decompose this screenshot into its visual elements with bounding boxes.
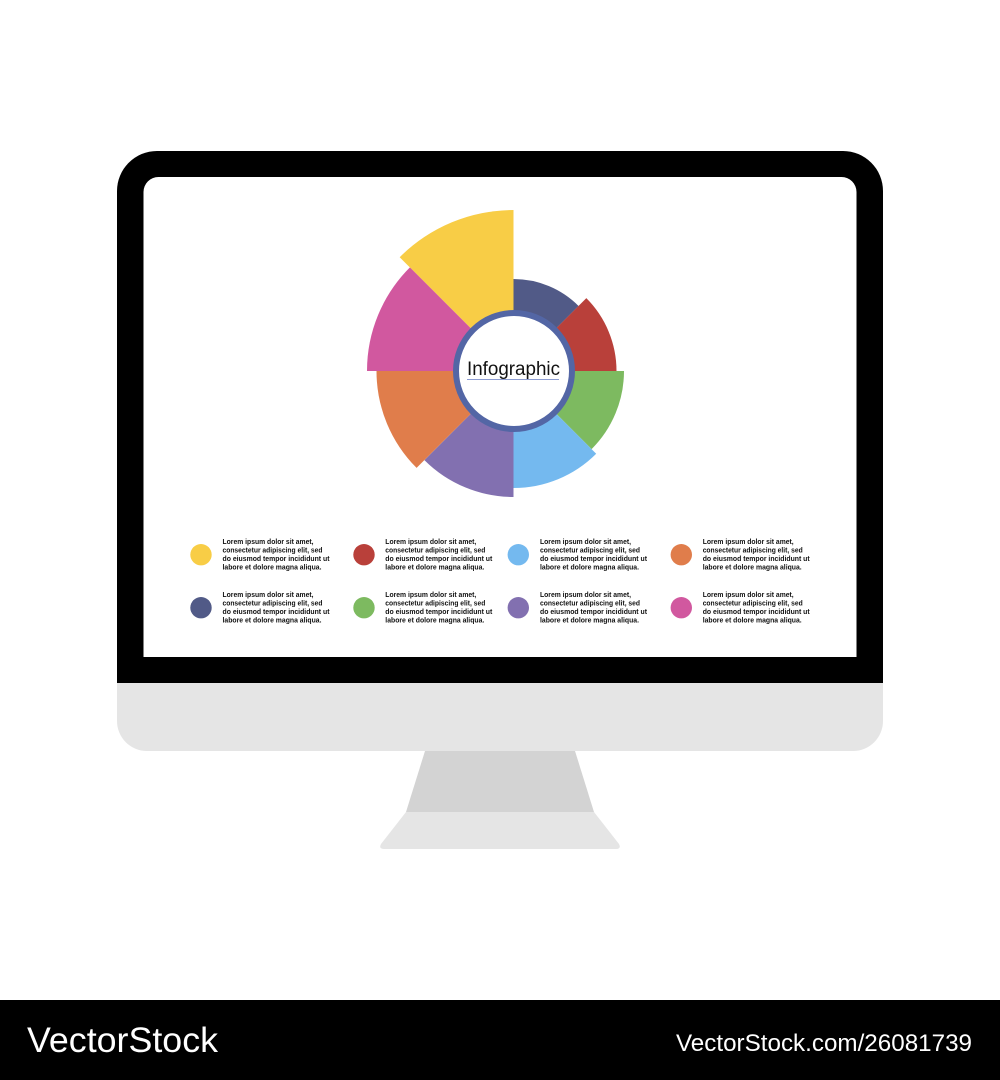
segment: orange xyxy=(376,371,514,468)
legend item: navy: labore et dolore magna aliqua. xyxy=(222,615,322,624)
legend item: pink: do eiusmod tempor incididunt ut xyxy=(703,607,810,616)
center title: Infographic xyxy=(467,359,560,380)
legend item: yellow: labore et dolore magna aliqua. xyxy=(222,562,322,571)
monitor screen xyxy=(144,177,856,657)
legend item: red: consectetur adipiscing elit, sed xyxy=(385,546,485,555)
legend item: light blue: do eiusmod tempor incididunt ut xyxy=(540,554,648,563)
legend item: green: do eiusmod tempor incididunt ut xyxy=(385,607,493,616)
segment: navy xyxy=(514,279,579,371)
legend item: light blue: labore et dolore magna aliqua. xyxy=(540,562,639,571)
desktop monitor xyxy=(117,151,883,849)
segment: green xyxy=(514,371,624,449)
monitor stand base xyxy=(380,812,620,849)
legend item: pink: labore et dolore magna aliqua. xyxy=(703,615,802,624)
legend item: orange: do eiusmod tempor incididunt ut xyxy=(703,554,810,563)
legend item: yellow xyxy=(190,537,330,571)
segment: pink xyxy=(367,267,514,371)
legend item: navy: consectetur adipiscing elit, sed xyxy=(222,599,322,608)
footer image id: VectorStock.com/26081739 xyxy=(676,1030,972,1057)
legend item: purple: do eiusmod tempor incididunt ut xyxy=(540,607,648,616)
legend item: light blue: Lorem ipsum dolor sit amet, xyxy=(540,537,631,546)
center circle xyxy=(456,313,572,429)
legend item: yellow: consectetur adipiscing elit, sed xyxy=(222,546,322,555)
segment: light blue xyxy=(514,371,596,488)
legend item: light blue xyxy=(508,537,648,571)
legend item: pink: consectetur adipiscing elit, sed xyxy=(703,599,803,608)
legend item: green xyxy=(353,590,493,624)
legend item: orange: Lorem ipsum dolor sit amet, xyxy=(703,537,794,546)
legend item: orange: consectetur adipiscing elit, sed xyxy=(703,546,803,555)
legend item: green: Lorem ipsum dolor sit amet, xyxy=(385,590,476,599)
legend item: navy: do eiusmod tempor incididunt ut xyxy=(222,607,330,616)
footer brand: VectorStock xyxy=(27,1021,219,1060)
legend item: green: labore et dolore magna aliqua. xyxy=(385,615,484,624)
title underline xyxy=(467,379,559,380)
watermark footer xyxy=(0,1000,1000,1080)
legend item: purple: labore et dolore magna aliqua. xyxy=(540,615,639,624)
monitor stand neck xyxy=(406,751,594,812)
segment: yellow xyxy=(400,210,514,371)
legend item: navy xyxy=(190,590,330,624)
legend item: pink xyxy=(671,590,810,624)
legend item: yellow: do eiusmod tempor incididunt ut xyxy=(222,554,330,563)
legend item: green: consectetur adipiscing elit, sed xyxy=(385,599,485,608)
segment: red xyxy=(514,298,616,371)
legend item: orange: labore et dolore magna aliqua. xyxy=(703,562,802,571)
legend xyxy=(190,537,810,624)
legend item: red xyxy=(353,537,493,571)
monitor chin xyxy=(117,683,883,751)
segment: purple xyxy=(424,371,514,497)
legend item: light blue: consectetur adipiscing elit, sed xyxy=(540,546,640,555)
legend item: red: Lorem ipsum dolor sit amet, xyxy=(385,537,476,546)
monitor bezel xyxy=(117,151,883,683)
legend item: orange xyxy=(671,537,810,571)
legend item: purple: consectetur adipiscing elit, sed xyxy=(540,599,640,608)
legend item: yellow: Lorem ipsum dolor sit amet, xyxy=(222,537,314,546)
legend item: red: do eiusmod tempor incididunt ut xyxy=(385,554,493,563)
radial segment chart xyxy=(367,210,624,497)
legend item: navy: Lorem ipsum dolor sit amet, xyxy=(222,590,314,599)
legend item: purple: Lorem ipsum dolor sit amet, xyxy=(540,590,631,599)
legend item: red: labore et dolore magna aliqua. xyxy=(385,562,484,571)
legend item: purple xyxy=(508,590,648,624)
legend item: pink: Lorem ipsum dolor sit amet, xyxy=(703,590,794,599)
